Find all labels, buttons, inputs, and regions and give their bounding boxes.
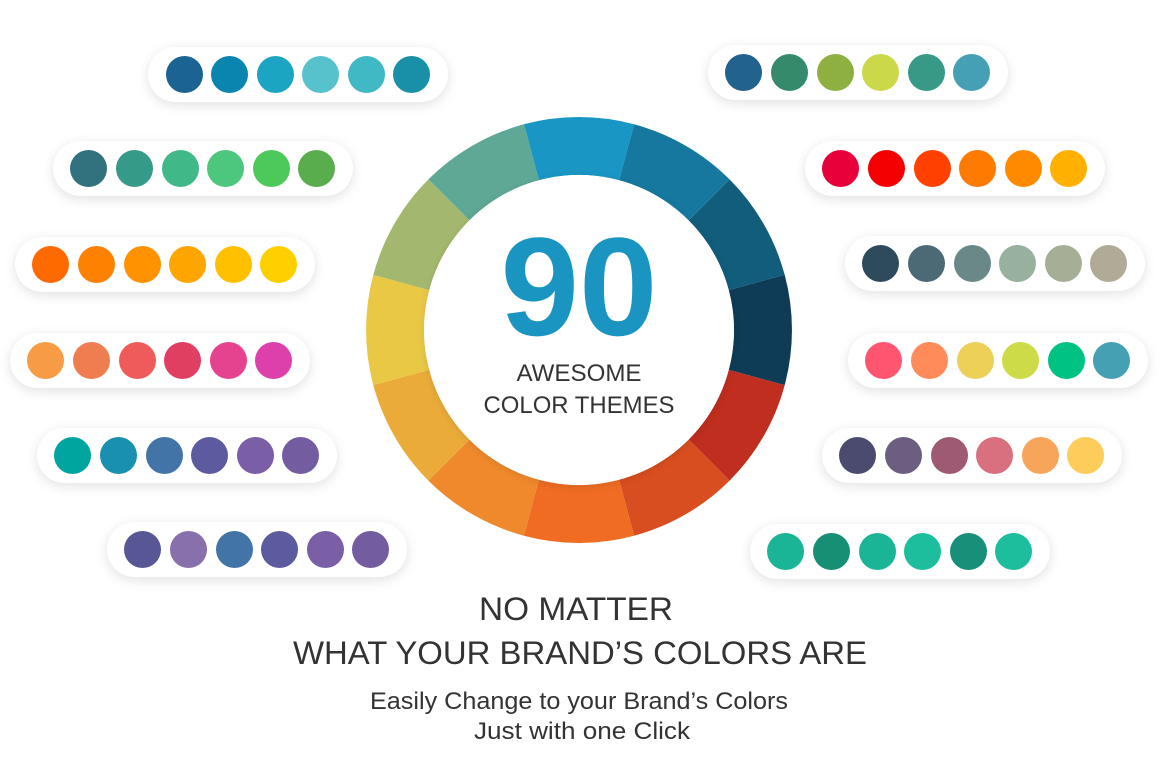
bottom headline and tagline (293, 591, 867, 745)
subtitle inside wheel: AWESOME (516, 360, 642, 387)
subtitle inside wheel: COLOR THEMES (484, 392, 674, 419)
palette pill: right 5 (822, 428, 1122, 483)
palette pill: right 2 (805, 141, 1105, 196)
palette pill: left 6 (107, 522, 407, 577)
palette pill: left 3 (15, 237, 315, 292)
palette pill: left 1 (148, 47, 448, 102)
palette pill: right 3 (845, 236, 1145, 291)
bottom headline and tagline: NO MATTER (479, 591, 673, 627)
palette pill: left 2 (53, 141, 353, 196)
palette pill: left 4 (10, 333, 310, 388)
bottom headline and tagline: Easily Change to your Brand’s Colors (370, 688, 788, 715)
subtitle inside wheel (484, 360, 674, 419)
wheel segments (366, 117, 792, 543)
big number 90: 90 (500, 208, 658, 365)
palette pill: right 4 (848, 333, 1148, 388)
palette pill: left 5 (37, 428, 337, 483)
palette pill: right 1 (708, 45, 1008, 100)
palette pill: right 6 (750, 524, 1050, 579)
bottom headline and tagline: WHAT YOUR BRAND’S COLORS ARE (293, 635, 867, 671)
bottom headline and tagline: Just with one Click (474, 718, 691, 745)
